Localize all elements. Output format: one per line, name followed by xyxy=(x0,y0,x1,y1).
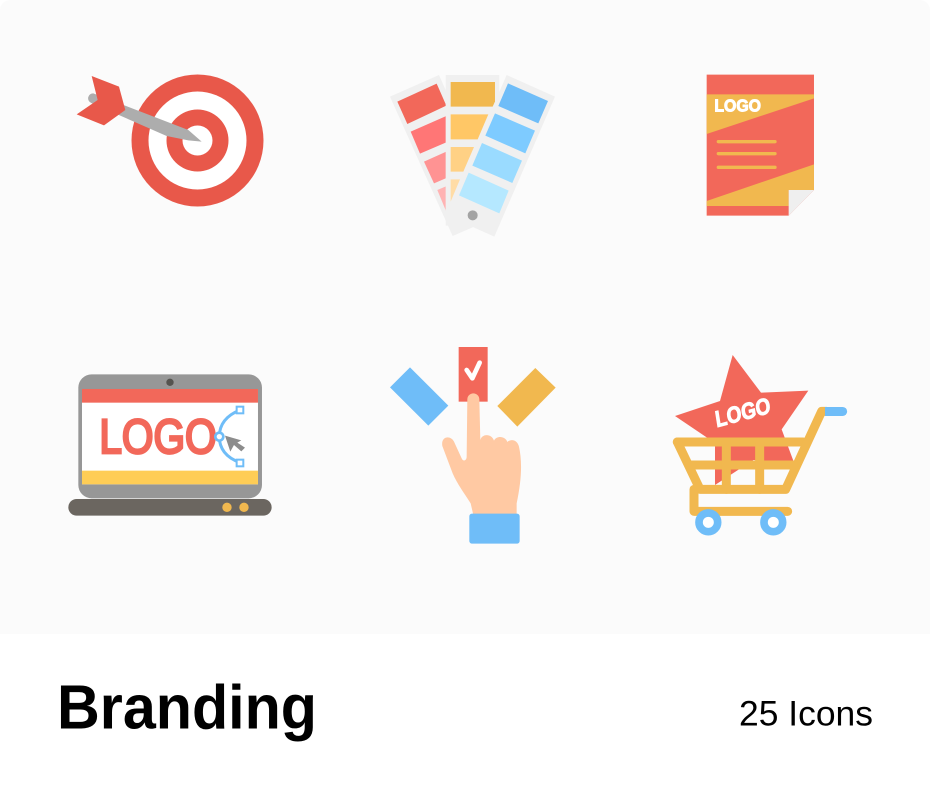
logo text: LOGO xyxy=(714,96,761,116)
left swatch card xyxy=(390,75,501,236)
star xyxy=(675,355,808,485)
cart frame xyxy=(677,411,827,511)
icon count: 25 Icons xyxy=(739,695,873,734)
target rings xyxy=(132,74,264,206)
icon: target with arrow xyxy=(77,74,263,206)
logo text: LOGO xyxy=(99,411,217,464)
screen top bar xyxy=(82,389,258,403)
centre swatch card xyxy=(446,75,499,226)
cursor xyxy=(225,436,245,452)
title: Branding xyxy=(57,673,317,742)
cart handle grip xyxy=(825,407,847,416)
icon: logo document xyxy=(707,75,814,216)
page xyxy=(707,75,814,216)
upper yellow band xyxy=(707,94,814,134)
selected red card xyxy=(459,347,488,402)
cuff xyxy=(469,514,520,544)
text lines xyxy=(718,142,775,167)
star logo text: LOGO xyxy=(713,392,772,432)
icon: hand selecting card xyxy=(390,347,556,544)
wheels xyxy=(699,513,783,532)
icon: laptop with logo xyxy=(68,374,272,516)
hand xyxy=(442,393,521,515)
arrow xyxy=(77,76,202,142)
blue card xyxy=(390,367,448,426)
lower yellow band xyxy=(707,164,814,206)
laptop body xyxy=(78,374,262,498)
screen bottom bar xyxy=(82,471,258,484)
bezier handle xyxy=(215,407,243,466)
icon: shopping cart with logo star xyxy=(675,355,847,532)
folded corner xyxy=(789,190,814,216)
camera xyxy=(166,379,174,386)
base lights xyxy=(222,503,249,512)
yellow card xyxy=(497,368,556,427)
screen xyxy=(82,389,258,484)
check mark xyxy=(467,363,480,378)
laptop base xyxy=(68,499,272,516)
right swatch card xyxy=(446,75,555,237)
icon: colour swatch fan xyxy=(390,75,555,237)
